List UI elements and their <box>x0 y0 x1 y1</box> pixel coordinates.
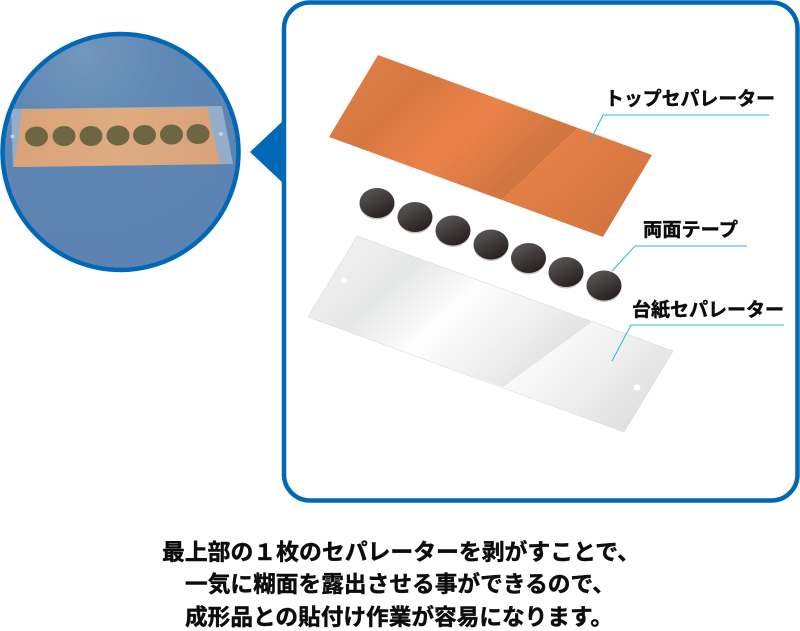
label: top separator: トップセパレーター <box>605 88 775 110</box>
leader line: double-sided tape <box>612 246 747 271</box>
main panel frame <box>284 2 798 500</box>
leader line: base separator <box>612 325 784 361</box>
orange top separator <box>329 55 652 237</box>
tape dots in photo <box>25 124 210 146</box>
caption text: 最上部の１枚のセパレーターを剥がすことで、 <box>162 539 640 565</box>
label: double-sided tape: 両面テープ <box>643 219 738 241</box>
orange top separator in photo <box>14 107 220 167</box>
caption text: 一気に糊面を露出させる事ができるので、 <box>185 571 615 597</box>
label: base separator: 台紙セパレーター <box>632 299 784 321</box>
clear base separator <box>308 236 673 432</box>
leader line: top separator <box>590 115 769 141</box>
double-sided tape dots <box>360 188 622 302</box>
photo circle: actual product <box>2 34 238 270</box>
caption text: 成形品との貼付け作業が容易になります。 <box>185 604 613 630</box>
clear base sheet in photo <box>11 106 233 167</box>
caption text <box>162 539 640 630</box>
mounting holes in photo <box>10 132 223 138</box>
pointer triangle <box>250 119 285 185</box>
